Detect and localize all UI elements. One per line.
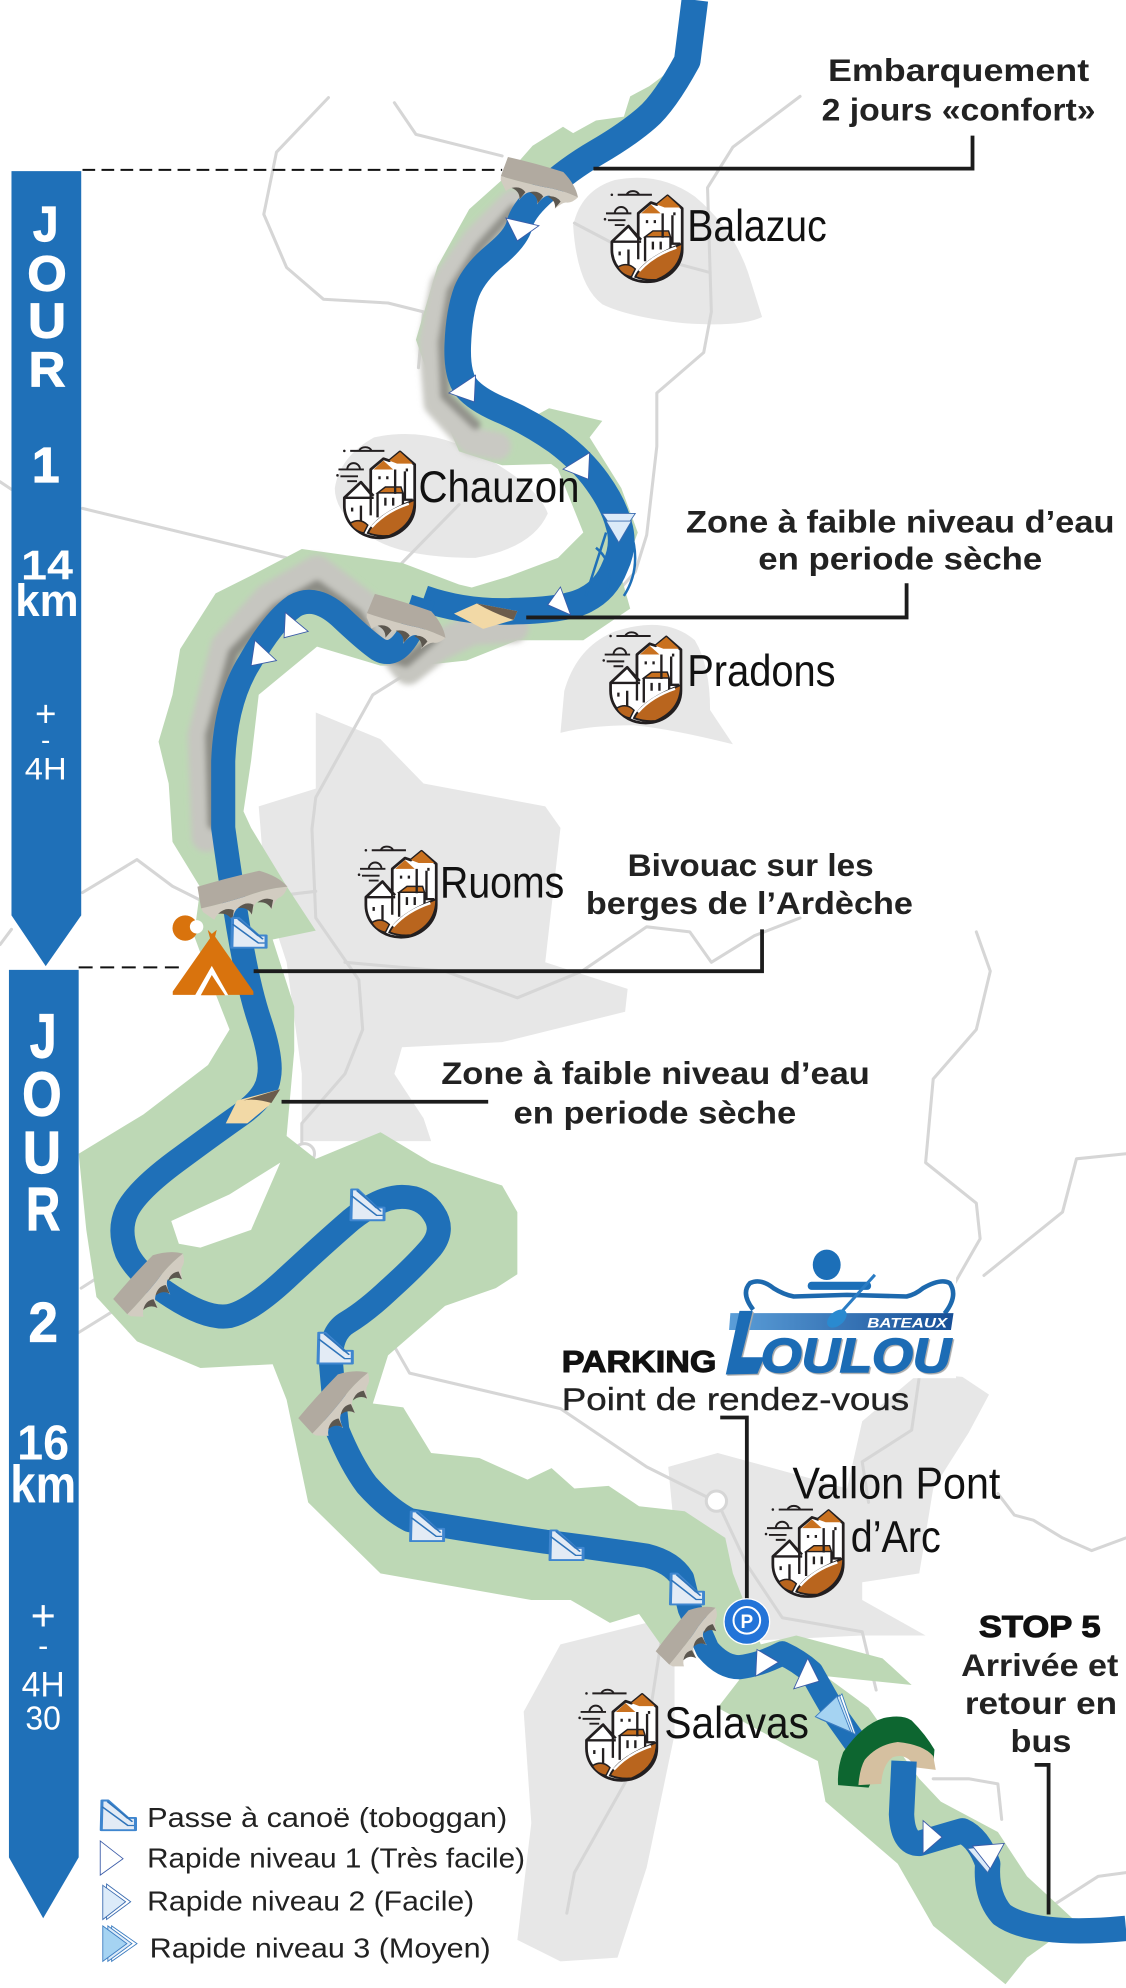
day 2 column: U <box>23 1119 61 1186</box>
village: Vallon Pont d'Arc: Vallon Pont <box>792 1460 1000 1509</box>
lake gap in vegetation <box>171 1163 280 1248</box>
day 2 column: + <box>31 1592 56 1640</box>
river: braided channels near low-water zone <box>586 532 635 596</box>
day 2 column: J <box>30 1002 56 1071</box>
village: Chauzon <box>336 447 579 538</box>
day 1 column: km <box>15 575 79 626</box>
day 1 column: 4H <box>25 751 67 787</box>
parking pin: P <box>740 1612 753 1633</box>
day 2 column: R <box>26 1175 60 1243</box>
road roundabouts <box>294 1144 727 1511</box>
day 1 column: O <box>27 246 67 301</box>
day start dashed line 2 <box>79 966 183 968</box>
callout: embarquement: 2 jours «confort» <box>822 91 1095 127</box>
callout: bivouac <box>254 847 913 971</box>
river: Ardèche, day 1 upper reach <box>424 0 695 611</box>
day 1 column: 1 <box>32 438 59 493</box>
parking pin <box>724 1599 770 1644</box>
day 2 column: km <box>10 1455 76 1514</box>
day 2 column <box>9 970 79 1918</box>
stop 5 callout: bus <box>1011 1723 1071 1759</box>
callout: low water zone 1: en periode sèche <box>758 540 1042 576</box>
stop 5 callout <box>961 1610 1119 1914</box>
village: Salavas: Salavas <box>664 1699 809 1748</box>
village: Ruoms: Ruoms <box>440 859 564 908</box>
gorge shading <box>203 203 514 837</box>
logo: Bateaux Loulou: BATEAUX <box>867 1314 948 1330</box>
callout: low water zone 2: Zone à faible niveau d’eau <box>441 1055 870 1091</box>
day 2 column: 16 <box>17 1415 69 1470</box>
low-water zone marker 2 <box>226 1089 280 1123</box>
day 2 column: 2 <box>29 1291 58 1353</box>
campsite icon <box>172 915 253 995</box>
day 2 column: 4H <box>22 1664 65 1704</box>
callout: embarquement <box>593 52 1096 169</box>
parking heading: Point de rendez-vous <box>562 1381 909 1417</box>
parking heading <box>562 1345 909 1604</box>
stop 5 callout: Arrivée et <box>961 1647 1119 1683</box>
callout: low water zone 2: en periode sèche <box>514 1094 796 1130</box>
legend: canoe pass: Passe à canoë (toboggan) <box>147 1802 507 1833</box>
legend <box>100 1801 525 1964</box>
village: Salavas <box>578 1690 809 1780</box>
Pont d'Arc natural arch <box>838 1717 936 1788</box>
callout: low water zone 2 <box>282 1055 870 1130</box>
rapids markers <box>251 218 1004 1873</box>
callout: bivouac: berges de l’Ardèche <box>586 885 913 921</box>
village: Vallon Pont d'Arc <box>765 1460 1000 1597</box>
day 1 column: 14 <box>21 541 74 588</box>
day 1 column: U <box>28 293 66 348</box>
village: Ruoms <box>358 847 564 937</box>
bridges <box>106 146 733 1676</box>
day start dashed line 1 <box>82 169 502 171</box>
day 1 column <box>11 171 81 966</box>
village: Pradons <box>602 632 836 723</box>
village: Pradons: Pradons <box>687 647 836 696</box>
river: final reach to arrival <box>902 1761 1126 1931</box>
village: Balazuc <box>604 191 827 282</box>
callout: embarquement: Embarquement <box>828 52 1090 88</box>
urban areas <box>259 178 989 1961</box>
canoe passes <box>232 918 704 1604</box>
parking heading: PARKING <box>562 1345 716 1379</box>
legend: rapid level 3: Rapide niveau 3 (Moyen) <box>150 1933 491 1964</box>
river: gorge loop to Ruoms and day 2 <box>122 598 862 1752</box>
day 2 column: 30 <box>25 1699 61 1736</box>
callout: low water zone 1: Zone à faible niveau d’eau <box>686 503 1115 539</box>
day 1 column: J <box>33 197 58 252</box>
logo: Bateaux Loulou <box>725 1249 956 1383</box>
logo: Bateaux Loulou: OULOU <box>761 1329 952 1383</box>
day 2 column: O <box>22 1061 62 1130</box>
legend: rapid level 1: Rapide niveau 1 (Très facile) <box>147 1843 525 1874</box>
stop 5 callout: STOP 5 <box>979 1610 1101 1644</box>
day 1 column: R <box>29 343 65 398</box>
legend: rapid level 2: Rapide niveau 2 (Facile) <box>147 1886 474 1917</box>
village: Chauzon: Chauzon <box>418 463 579 512</box>
callout: low water zone 1 <box>526 503 1115 617</box>
day 1 column: - <box>41 724 50 755</box>
legend: rapid level 3 <box>103 1926 491 1964</box>
day 2 column: - <box>38 1629 48 1663</box>
low-water zone marker 1 <box>454 604 517 629</box>
day 1 column: + <box>35 693 56 734</box>
stop 5 callout: retour en <box>965 1685 1117 1721</box>
callout: bivouac: Bivouac sur les <box>628 847 874 883</box>
village: Balazuc: Balazuc <box>687 202 827 251</box>
village: Vallon Pont d'Arc: d’Arc <box>851 1513 941 1562</box>
